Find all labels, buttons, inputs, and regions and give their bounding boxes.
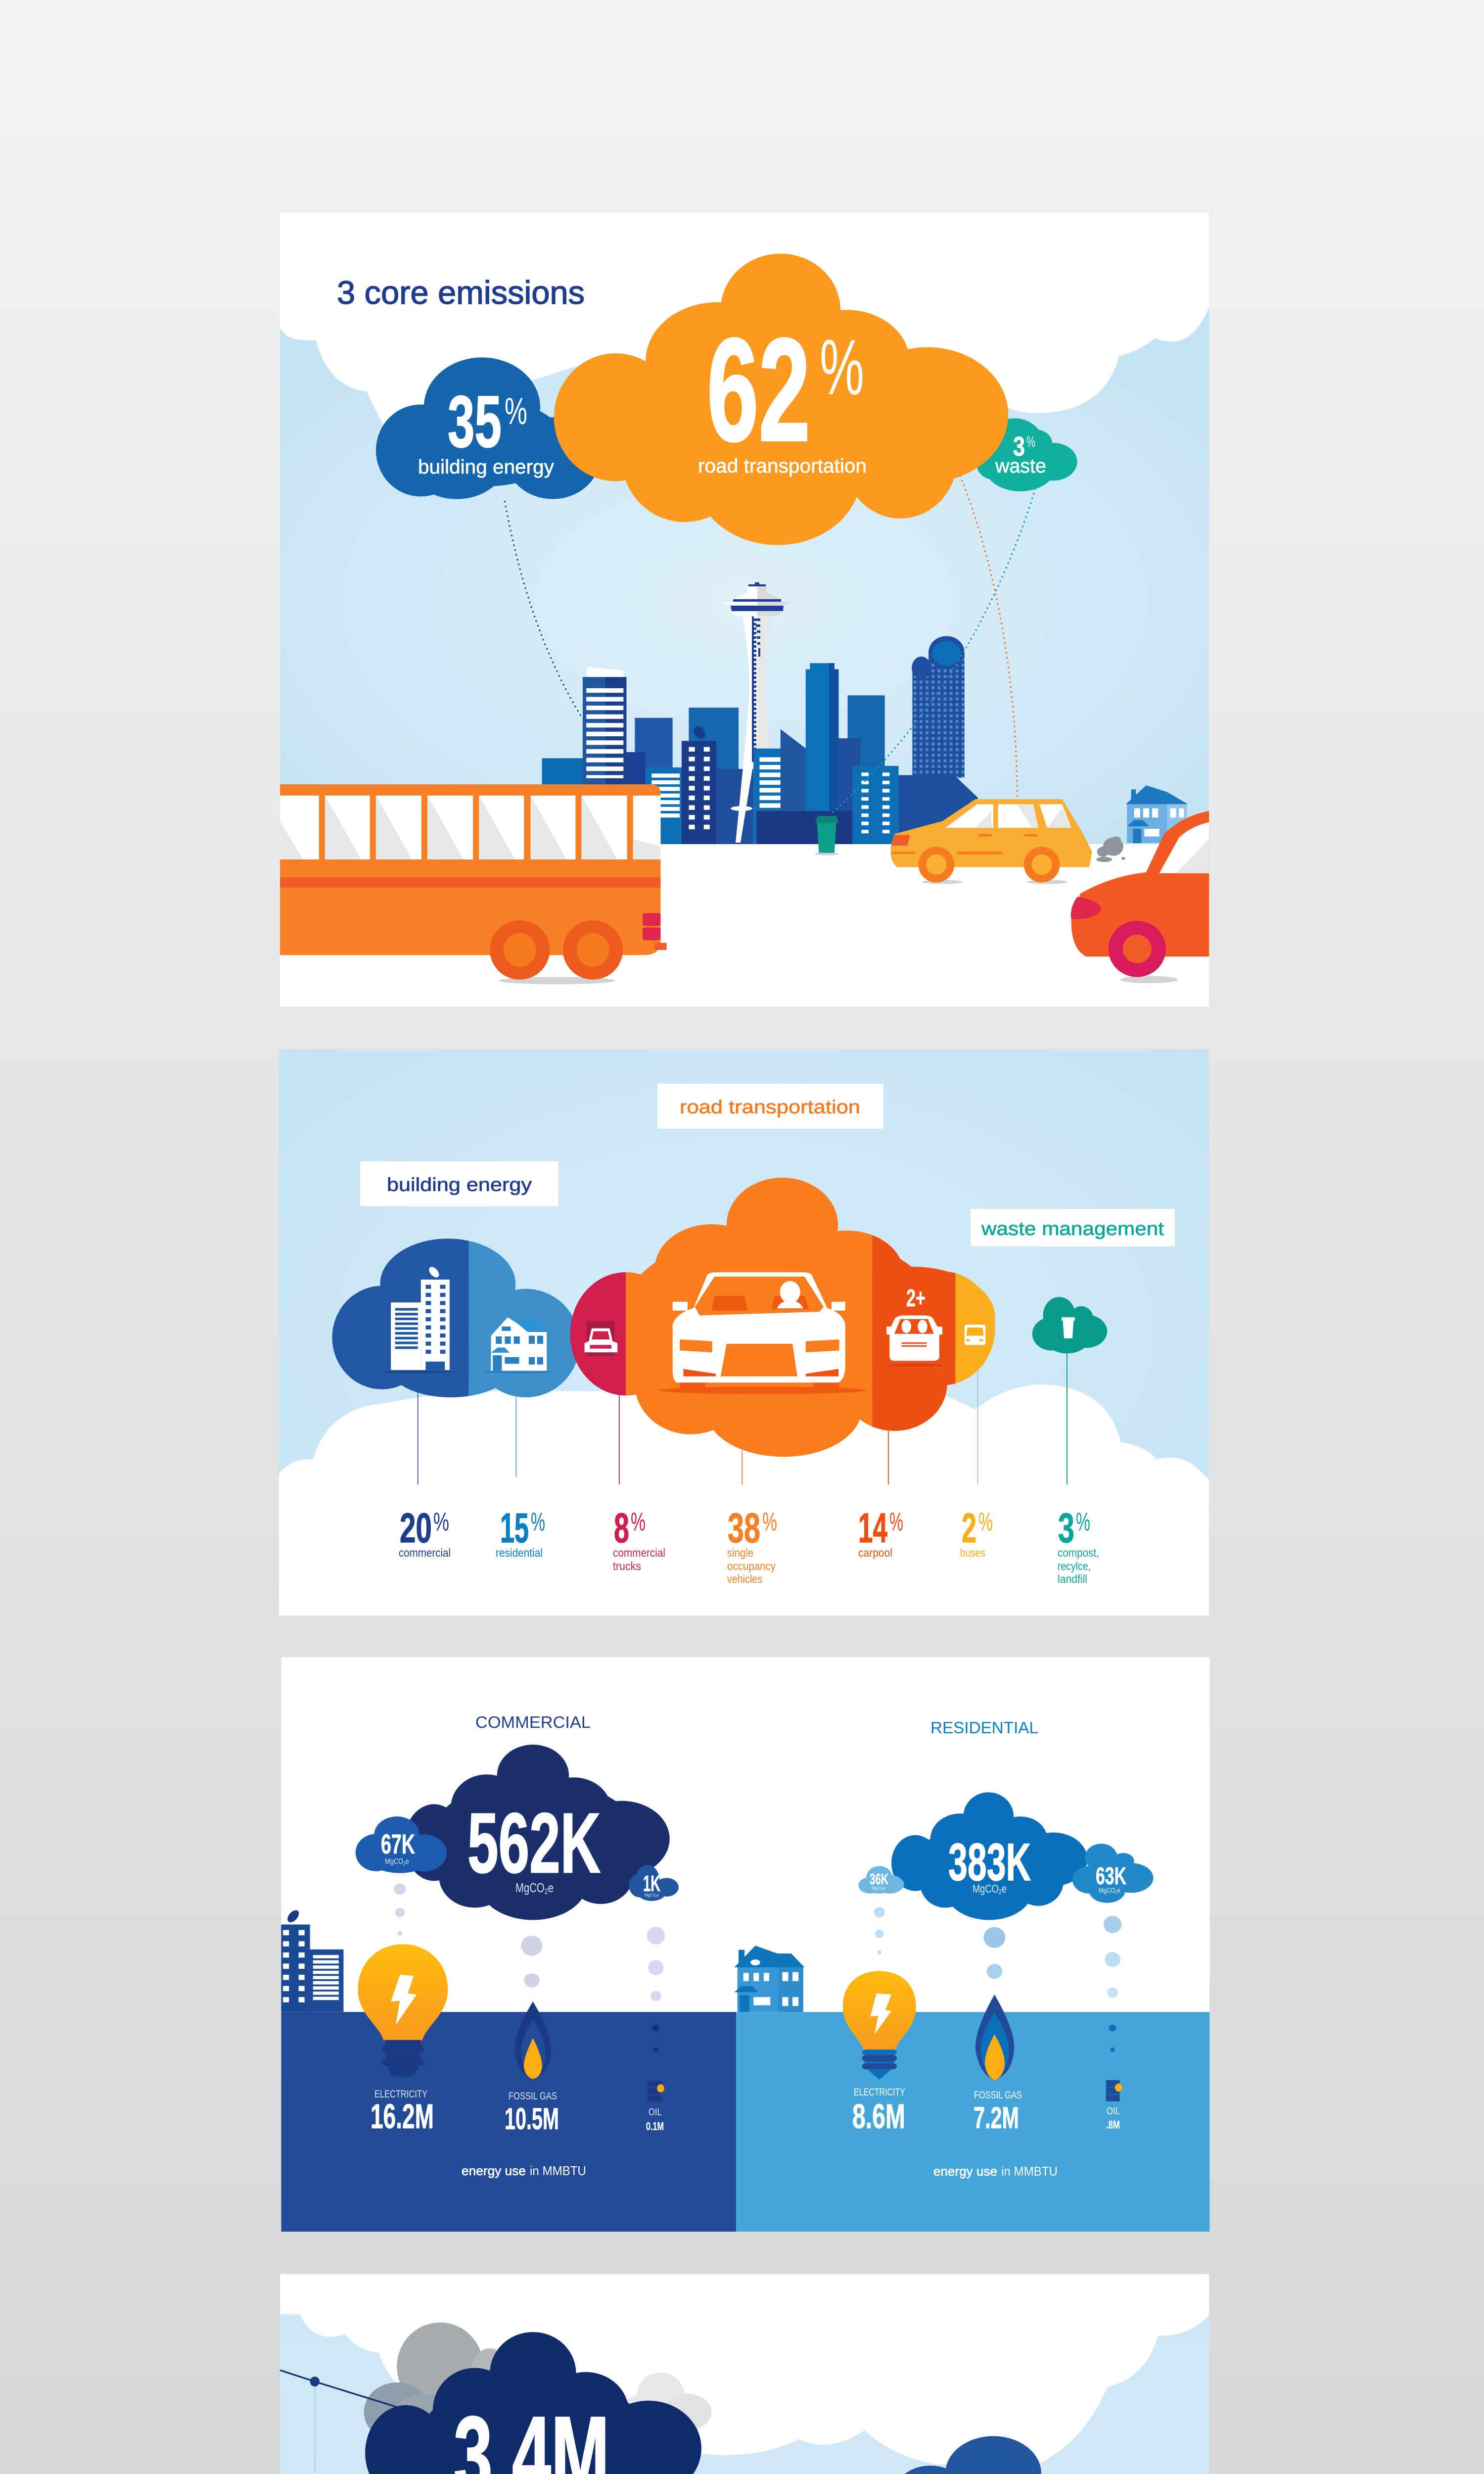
icon: flame commercial [515,2001,551,2079]
stats: commercial clouds [381,1796,660,1899]
trend line [280,2370,1209,2474]
stat: 35 percent building energy: building energy [418,456,554,478]
stat: 38 percent single occupancy vehicles: single [727,1546,753,1559]
stats: commercial clouds: e [657,1893,659,1898]
icon: trash bin [1062,1317,1075,1338]
stat: 35 percent building energy: 35 [448,381,502,463]
stats: residential energy use: ELECTRICITY [854,2087,905,2098]
stat: 8 percent commercial trucks: 8 [614,1505,629,1551]
stats: commercial energy use: ELECTRICITY [374,2089,427,2100]
stats: commercial clouds: e [548,1880,554,1895]
text: 2 plus: 2+ [906,1285,926,1312]
stats: commercial clouds: MgCO [645,1893,657,1898]
cloud: waste [977,418,1077,491]
panel: commercial and residential energy [281,1657,1209,2232]
stat: 2 percent buses [960,1505,993,1559]
stat: 8 percent commercial trucks: % [631,1508,646,1536]
stats: residential clouds: e [1002,1882,1007,1895]
stat: 38 percent single occupancy vehicles [727,1505,777,1585]
stats: residential clouds: MgCO [1099,1886,1118,1894]
panel background [281,1657,1209,2232]
panel: emissions over time [280,2274,1209,2474]
icon: truck [585,1321,617,1356]
stats: commercial clouds: 2 [655,1896,657,1899]
cloud: building energy [376,357,600,499]
stat: 38 percent single occupancy vehicles: vehicles [727,1572,762,1585]
stats: commercial energy use: 16.2M [371,2097,434,2136]
stat: 38 percent single occupancy vehicles: % [762,1508,777,1536]
icon: house [483,1317,553,1374]
stats: residential clouds: e [1117,1886,1120,1894]
stats: commercial clouds: MgCO [385,1857,408,1866]
stat: 62 percent road transportation: road transportation [698,455,867,477]
icon: residential house [735,1946,804,2012]
stat: 3 percent compost recycle landfill: landfill [1058,1572,1087,1585]
stat: 8 percent commercial trucks [613,1505,665,1572]
stat: 2 percent buses: 2 [962,1505,976,1551]
stats: residential clouds: MgCO [973,1882,1005,1895]
illustration: red car [1071,811,1209,983]
stats: residential energy use: FOSSIL GAS [974,2090,1022,2101]
stats: commercial clouds: 2 [403,1861,406,1867]
stat: 3 percent compost recycle landfill [1058,1505,1099,1585]
stat: 3 percent compost recycle landfill: compost, [1058,1546,1099,1559]
cloud: 67K [356,1816,447,1873]
stats: residential clouds: 2 [999,1888,1002,1896]
stat: 3 percent waste: 3 [1013,431,1025,462]
cloud: 562K [404,1745,670,1920]
stat: 20 percent commercial: commercial [399,1546,451,1559]
dotted connector lines [505,476,1035,813]
icon: light bulb residential [843,1971,916,2080]
icon: commercial buildings [281,1909,343,2012]
gray smog clouds [364,2323,711,2441]
stats: commercial energy use: in MMBTU [530,2163,586,2178]
stat: 62 percent road transportation: % [820,323,864,411]
panel: emission breakdown [279,1049,1209,1616]
stat: 15 percent residential: 15 [500,1505,529,1551]
icon: carpool van [885,1315,942,1367]
illustration: space needle [722,566,792,843]
stat: 3 percent waste: % [1026,434,1035,450]
icon: house [1126,785,1188,843]
timeline grid [315,2381,1180,2474]
icon: light bulb commercial [358,1944,448,2077]
stats: commercial clouds: 1K [643,1871,660,1896]
stats: residential clouds: 383K [948,1832,1031,1892]
stats: commercial energy use: 10.5M [505,2102,559,2136]
stat: 38 percent single occupancy vehicles: occupancy [727,1560,776,1572]
stats: commercial clouds: 562K [467,1796,601,1891]
label: road transportation: road transportation [680,1097,860,1118]
panel background with white cloud [279,1049,1209,1616]
stat: 8 percent commercial trucks: trucks [613,1560,641,1572]
stat: 35 percent building energy: % [505,390,527,432]
label: waste management [971,1209,1175,1246]
icon: office buildings [384,1266,456,1374]
stat: 14 percent carpool: 14 [858,1505,887,1551]
cloud: 63K [1072,1844,1154,1903]
illustration: back city buildings [542,636,978,844]
stat: 2 percent buses: % [978,1508,993,1536]
icon: oil barrel commercial [648,2081,664,2101]
icon: oil barrel residential [1106,2080,1122,2101]
falling drops: commercial [394,1884,665,2052]
stats: residential clouds: 63K [1096,1863,1126,1890]
stats: residential clouds: 2 [882,1889,884,1892]
icon: single occupancy car [659,1272,866,1394]
cloud: road transportation [554,254,1008,545]
stats: residential clouds: 36K [870,1870,888,1888]
falling drops: residential [874,1907,1121,2052]
stats: residential energy use: in MMBTU [1001,2164,1058,2179]
stat: 62 percent road transportation: 62 [707,308,810,472]
cloud: 2008 total [365,2332,701,2474]
panel: 3 core emissions [280,213,1209,1007]
stats: commercial energy use: FOSSIL GAS [509,2091,557,2102]
illustration: front city buildings [753,663,899,844]
stats: residential energy use: OIL [1107,2106,1120,2117]
stats: residential energy use: 7.2M [974,2101,1019,2135]
stats: commercial clouds: 67K [381,1828,415,1859]
stat: 8 percent commercial trucks: commercial [613,1546,665,1559]
stat: 35 percent building energy [418,381,554,478]
panel background and cloud [280,2274,1209,2474]
stat: 3 percent compost recycle landfill: % [1076,1508,1090,1536]
stats: residential clouds: e [883,1886,885,1891]
illustration: yellow car [890,799,1092,884]
label: road transportation [657,1084,883,1129]
stat: 20 percent commercial: % [433,1508,449,1536]
label: building energy [360,1161,558,1206]
stats: commercial energy use: OIL [649,2107,662,2118]
cloud: building energy split [332,1238,580,1397]
stats: residential energy use [852,2087,1120,2179]
cloud: 383K [891,1792,1087,1920]
icon: green trash bin [815,816,838,856]
icon: flame residential [975,1995,1014,2080]
panel background and white cloud [280,213,1209,1007]
stats: residential energy use: 8.6M [852,2097,905,2136]
stat: 3 percent waste [995,431,1046,477]
stat: 3 percent compost recycle landfill: recylce, [1058,1560,1091,1572]
stats: residential clouds: MgCO [872,1886,885,1891]
cloud: waste management [1032,1297,1107,1353]
stat: 15 percent residential: residential [496,1546,543,1559]
cloud: road transportation split [570,1178,995,1457]
icon: exhaust smoke [1096,837,1125,862]
connector lines [418,1353,1067,1484]
stats: residential clouds [870,1832,1126,1896]
illustration: orange bus [280,784,667,984]
label: building energy: building energy [387,1175,532,1195]
stats: residential energy use: .8M [1106,2118,1120,2131]
heading: residential: RESIDENTIAL [930,1718,1038,1737]
stats: commercial energy use: energy use [462,2163,526,2178]
icon: bus [965,1325,985,1345]
stat: 20 percent commercial: 20 [400,1505,432,1551]
stats: commercial clouds: 2 [545,1888,548,1896]
stats: commercial clouds: e [406,1857,409,1866]
cloud: 36K [858,1866,904,1894]
label: waste management: waste management [981,1219,1164,1239]
stats: commercial energy use: 0.1M [646,2120,664,2133]
stat: 3 percent waste: waste [995,455,1046,477]
stat: 38 percent single occupancy vehicles: 38 [728,1505,760,1551]
cloud: 1K [629,1865,679,1901]
stats: commercial energy use [371,2089,664,2178]
stats: commercial clouds: MgCO [515,1880,553,1895]
stat: 15 percent residential: % [531,1508,545,1536]
cloud: 2016 total [840,2436,1078,2474]
stat: 2 percent buses: buses [960,1546,985,1559]
stats: residential energy use: energy use [933,2164,997,2179]
heading: commercial: COMMERCIAL [475,1713,591,1731]
stat: 3 percent compost recycle landfill: 3 [1058,1505,1074,1551]
stat: 14 percent carpool: % [889,1508,903,1536]
heading: 3 core emissions [337,274,585,311]
stats: residential clouds: 2 [1115,1890,1117,1895]
stat: 14 percent carpool: carpool [858,1546,892,1559]
